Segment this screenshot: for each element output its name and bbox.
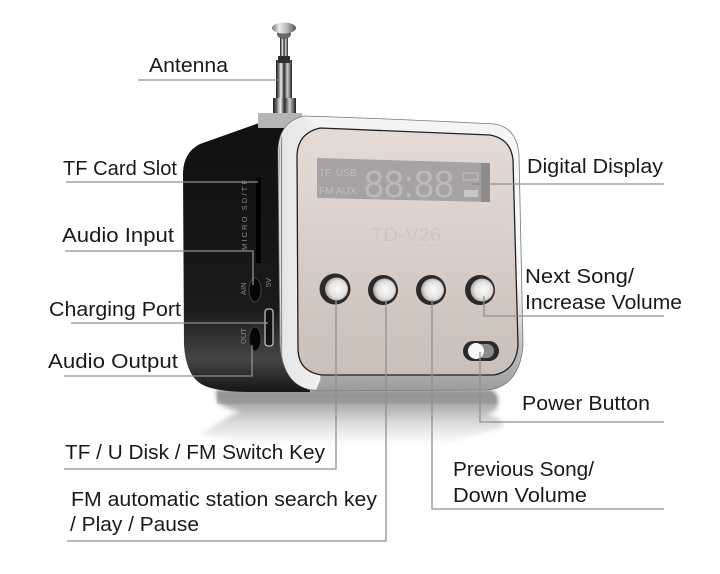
label: play pause: / Play / Pause (70, 513, 199, 536)
label: increase volume: Increase Volume (525, 291, 682, 314)
audio output jack (249, 327, 261, 351)
table reflection (200, 390, 503, 445)
label: audio output: Audio Output (48, 350, 178, 373)
silver front frame (278, 116, 523, 391)
label: down volume: Down Volume (453, 484, 587, 507)
label: antenna: Antenna (149, 54, 229, 77)
button captions: ▸ /V+ (464, 315, 483, 324)
icon: antenna (272, 22, 296, 113)
label: charging port: Charging Port (49, 298, 181, 321)
label: tf card slot: TF Card Slot (63, 157, 177, 180)
charging port (265, 309, 273, 346)
side labels: AIN (239, 282, 248, 295)
digital display: FM (319, 186, 333, 197)
side labels: MICRO SD/TF (240, 180, 249, 250)
digital display: USB (336, 168, 357, 179)
side labels: OUT (239, 328, 248, 344)
power switch (463, 341, 499, 361)
label: audio input: Audio Input (62, 224, 174, 247)
digital display: TF (319, 168, 331, 179)
front panel (297, 128, 518, 375)
digital display: AUX (336, 186, 357, 197)
label: fm search key: FM automatic station search key (71, 488, 378, 511)
label: power button: Power Button (522, 392, 650, 415)
label: previous song: Previous Song/ (453, 458, 594, 481)
digital display (317, 158, 490, 206)
button: previous (416, 275, 446, 305)
speaker body (183, 113, 310, 392)
audio input jack (249, 278, 261, 302)
label: next song: Next Song/ (525, 265, 634, 288)
button: play pause (368, 275, 398, 305)
label: digital display: Digital Display (527, 155, 664, 178)
chrome side edges (279, 117, 322, 390)
label: switch key: TF / U Disk / FM Switch Key (65, 441, 326, 464)
button: mode (320, 274, 350, 304)
leader lines (64, 80, 664, 541)
button: next (465, 275, 495, 305)
side labels (239, 180, 273, 344)
side labels: 5V (264, 278, 273, 287)
buttons (320, 274, 495, 305)
model name: TD-V26 (371, 225, 441, 245)
button captions: MODE (317, 319, 341, 328)
button captions: ▶/■ (368, 319, 381, 328)
digital display: 88:88 (364, 164, 454, 206)
card slot (256, 178, 261, 263)
button captions (317, 315, 483, 328)
button captions: ◂ /V- (416, 319, 432, 328)
